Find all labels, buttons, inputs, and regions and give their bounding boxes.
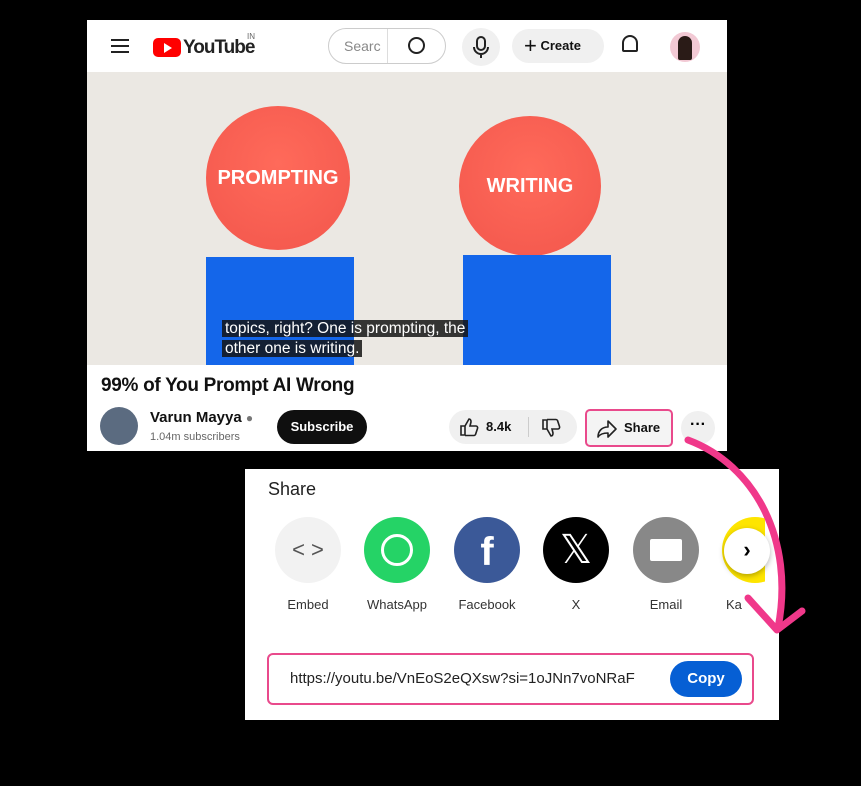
share icons row: X xyxy=(572,597,580,612)
avatar xyxy=(670,32,700,62)
share icons row: Ka xyxy=(726,597,742,612)
icon: next arrow: › xyxy=(743,537,751,562)
like/dislike xyxy=(449,410,577,444)
icon: bell xyxy=(622,35,638,52)
icon: kakao partial xyxy=(722,517,788,583)
heading: share: Share xyxy=(268,479,316,499)
icon: embed: < > xyxy=(292,537,324,562)
video title: 99% of You Prompt AI Wrong xyxy=(101,375,354,396)
url text: https://youtu.be/VnEoS2eQXsw?si=1oJNn7voNRaF xyxy=(290,670,635,687)
link box (highlighted) xyxy=(267,653,754,705)
shape: blue block left xyxy=(206,257,354,367)
icon: facebook xyxy=(454,517,520,583)
share button (highlighted) xyxy=(585,409,673,447)
channel info: Varun Mayya ● xyxy=(150,409,253,426)
create button xyxy=(512,29,604,63)
caption xyxy=(222,320,468,357)
shape: writing circle: WRITING xyxy=(487,175,573,197)
subscribe button xyxy=(277,410,367,444)
share icons row: Email xyxy=(650,597,682,612)
search box: Searc xyxy=(344,38,381,54)
labels: Embed xyxy=(287,597,329,612)
icon: x: 𝕏 xyxy=(560,528,592,572)
shape: blue block right xyxy=(463,255,611,367)
copy button xyxy=(670,661,742,697)
channel info xyxy=(100,407,253,445)
share icons row xyxy=(275,517,765,612)
shape: prompting circle xyxy=(206,106,350,250)
video frame xyxy=(87,72,727,365)
logo: youtube xyxy=(153,32,255,58)
icon: x xyxy=(543,517,609,583)
share icons row: Facebook xyxy=(458,597,516,612)
more button: ··· xyxy=(690,416,706,433)
share button (highlighted): Share xyxy=(624,420,660,435)
shape: writing circle xyxy=(459,116,601,256)
search box xyxy=(328,28,446,64)
icon: menu xyxy=(111,39,129,53)
shape: prompting circle: PROMPTING xyxy=(217,167,339,189)
icon: next arrow xyxy=(724,528,770,574)
icon: whatsapp xyxy=(364,517,430,583)
more button xyxy=(681,411,715,445)
share icons row: WhatsApp xyxy=(367,597,427,612)
nav bar xyxy=(111,28,700,66)
caption: other one is writing. xyxy=(225,340,359,357)
panel: share dialog xyxy=(245,469,779,720)
panel: youtube page xyxy=(87,20,727,451)
subscribe button: Subscribe xyxy=(291,419,353,434)
channel info: 1.04m subscribers xyxy=(150,431,240,443)
icon: mic xyxy=(462,28,500,66)
like/dislike: 8.4k xyxy=(486,419,511,434)
copy button: Copy xyxy=(687,670,725,687)
icon: embed xyxy=(275,517,341,583)
caption: topics, right? One is prompting, the xyxy=(225,320,465,337)
icon: facebook: f xyxy=(480,530,494,574)
create button: + Create xyxy=(524,33,581,58)
icon: email xyxy=(633,517,699,583)
logo: youtube: IN xyxy=(247,32,255,41)
logo: youtube: YouTube xyxy=(183,37,254,58)
